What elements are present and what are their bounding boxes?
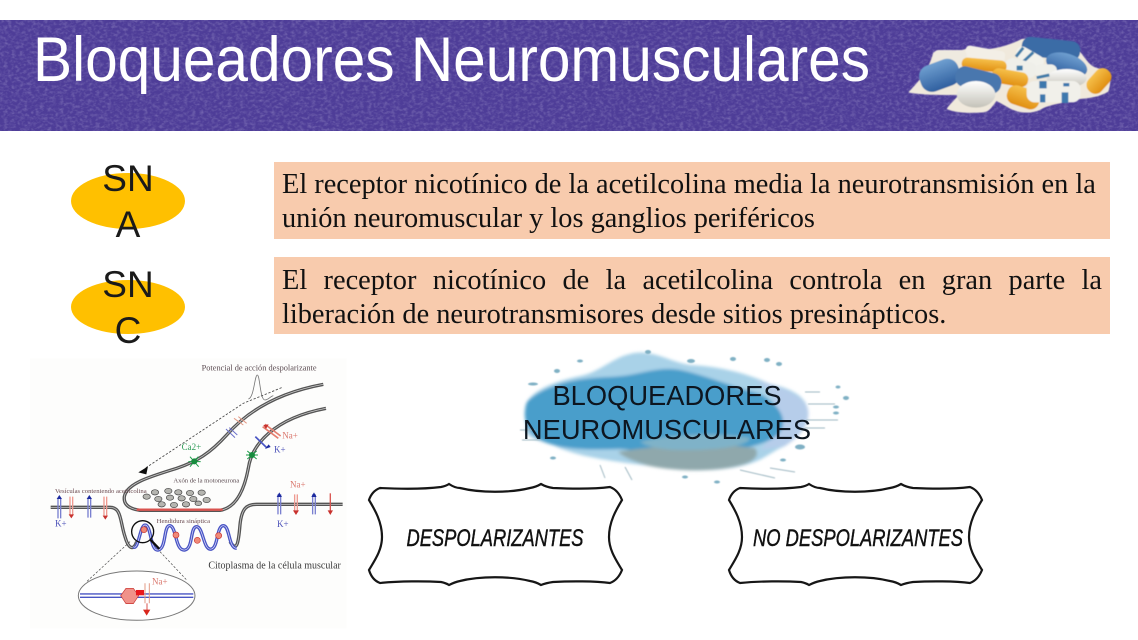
diagram labels: Ca2+ [182,442,201,452]
channels [188,417,281,467]
frame: despolarizantes: DESPOLARIZANTES [406,525,584,552]
frame: no despolarizantes [729,484,982,585]
badge: SNC: C [115,310,141,351]
badge: SNA [71,158,185,245]
title: Bloqueadores Neuromusculares [33,25,870,95]
diagram labels: Na+ [290,480,306,490]
diagram labels: K+ [274,445,286,455]
icon: pills [908,36,1115,113]
diagram labels [55,363,342,586]
badge: SNC: SN [102,264,154,305]
heading splash: Bloqueadores Neuromusculares: NEUROMUSCULARES [523,414,811,445]
vesicles [143,488,210,508]
action potential trace [248,375,273,400]
axon membrane [124,384,326,510]
muscle membrane [51,504,343,550]
text box: presynaptic release: El receptor nicotínico de la acetilcolina controla en gran parte la liberación de neurotransmisores desde sitios presinápticos. [282,265,1102,330]
paint splatter [520,350,849,484]
heading splash: Bloqueadores Neuromusculares: BLOQUEADORES [552,380,782,411]
diagram labels: Na+ [282,430,298,440]
badge: SNA: A [116,204,141,245]
diagram labels: Na+ [152,576,168,586]
text box: receptor in neuromuscular junction [274,162,1110,239]
diagram labels: Vesículas conteniendo acetilcolina [55,488,147,495]
badge: SNC [71,264,185,351]
diagram: neuromuscular junction [30,358,347,628]
text box: receptor in neuromuscular junction: unión neuromuscular y los ganglios periféricos [282,203,815,234]
magnifier [132,521,154,543]
frame: no despolarizantes: NO DESPOLARIZANTES [753,525,963,552]
diagram labels: K+ [55,519,67,529]
header banner [0,20,1138,131]
zoom inset [78,571,195,620]
frame: despolarizantes [369,484,622,585]
heading splash: Bloqueadores Neuromusculares [520,350,849,484]
badge: SNA: SN [102,158,154,199]
diagram labels: Axón de la motoneurona [173,478,239,485]
diagram labels: Hendidura sináptica [157,518,210,525]
diagram labels: Potencial de acción despolarizante [202,363,317,372]
text box: receptor in neuromuscular junction: El receptor nicotínico de la acetilcolina media la neurotransmisión en la [282,169,1096,200]
diagram labels: Citoplasma de la célula muscular [208,560,342,571]
ion channels on membrane [58,493,330,518]
diagram labels: K+ [277,519,289,529]
receptors in folds [141,527,222,543]
